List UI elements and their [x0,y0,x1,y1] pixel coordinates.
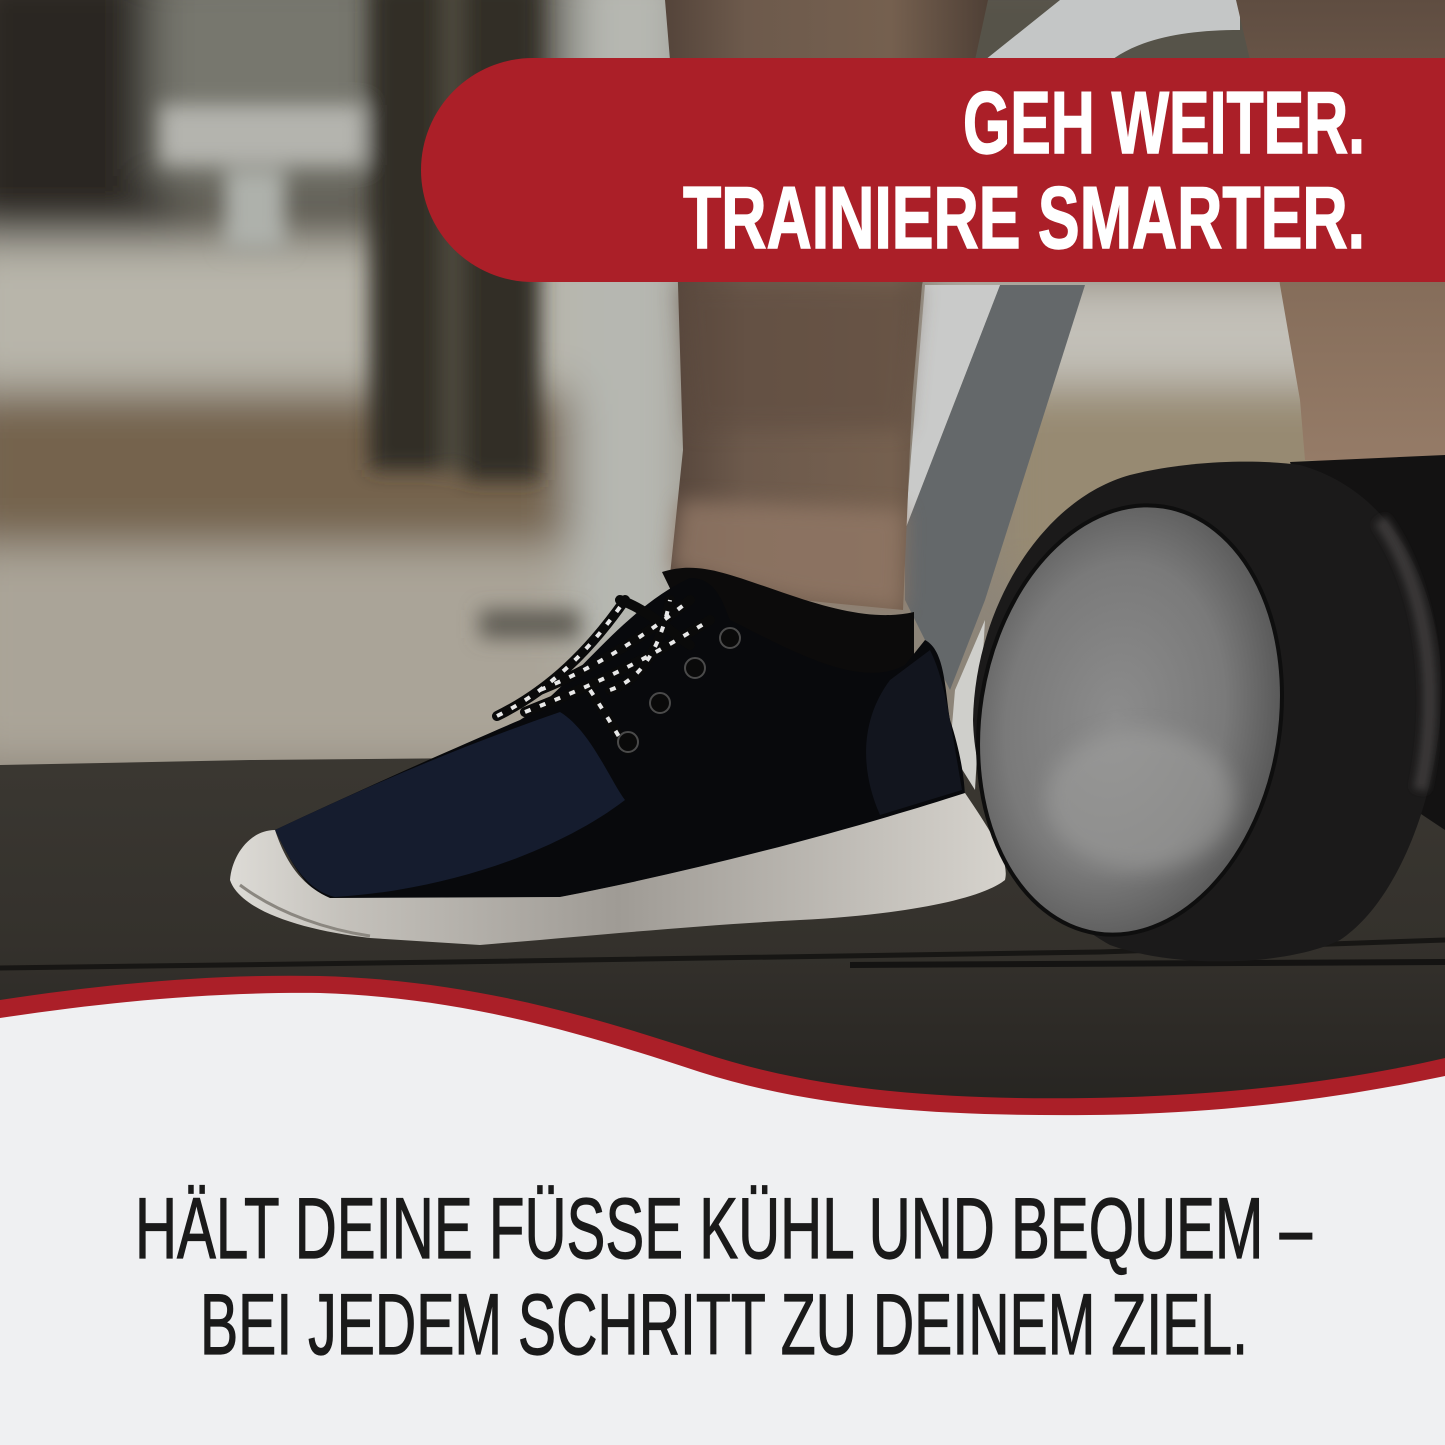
sock [662,568,914,710]
shoe upper [275,578,965,899]
headline banner [421,58,1445,282]
laces [497,600,710,750]
photo: bench frame [905,0,1240,790]
wave: red band [0,976,1445,1445]
photo: dumbbell [948,455,1445,961]
photo: right leg [1236,0,1445,470]
photo: gym floor mat [0,740,1445,1110]
bottom panel [0,993,1445,1445]
photo: gym background [0,0,1445,1100]
sole [230,793,1006,945]
heel mesh [866,650,962,815]
eyelets [618,628,740,752]
photo: sneaker [230,568,1006,945]
mesh toe [275,712,625,897]
photo: left leg [665,0,988,610]
